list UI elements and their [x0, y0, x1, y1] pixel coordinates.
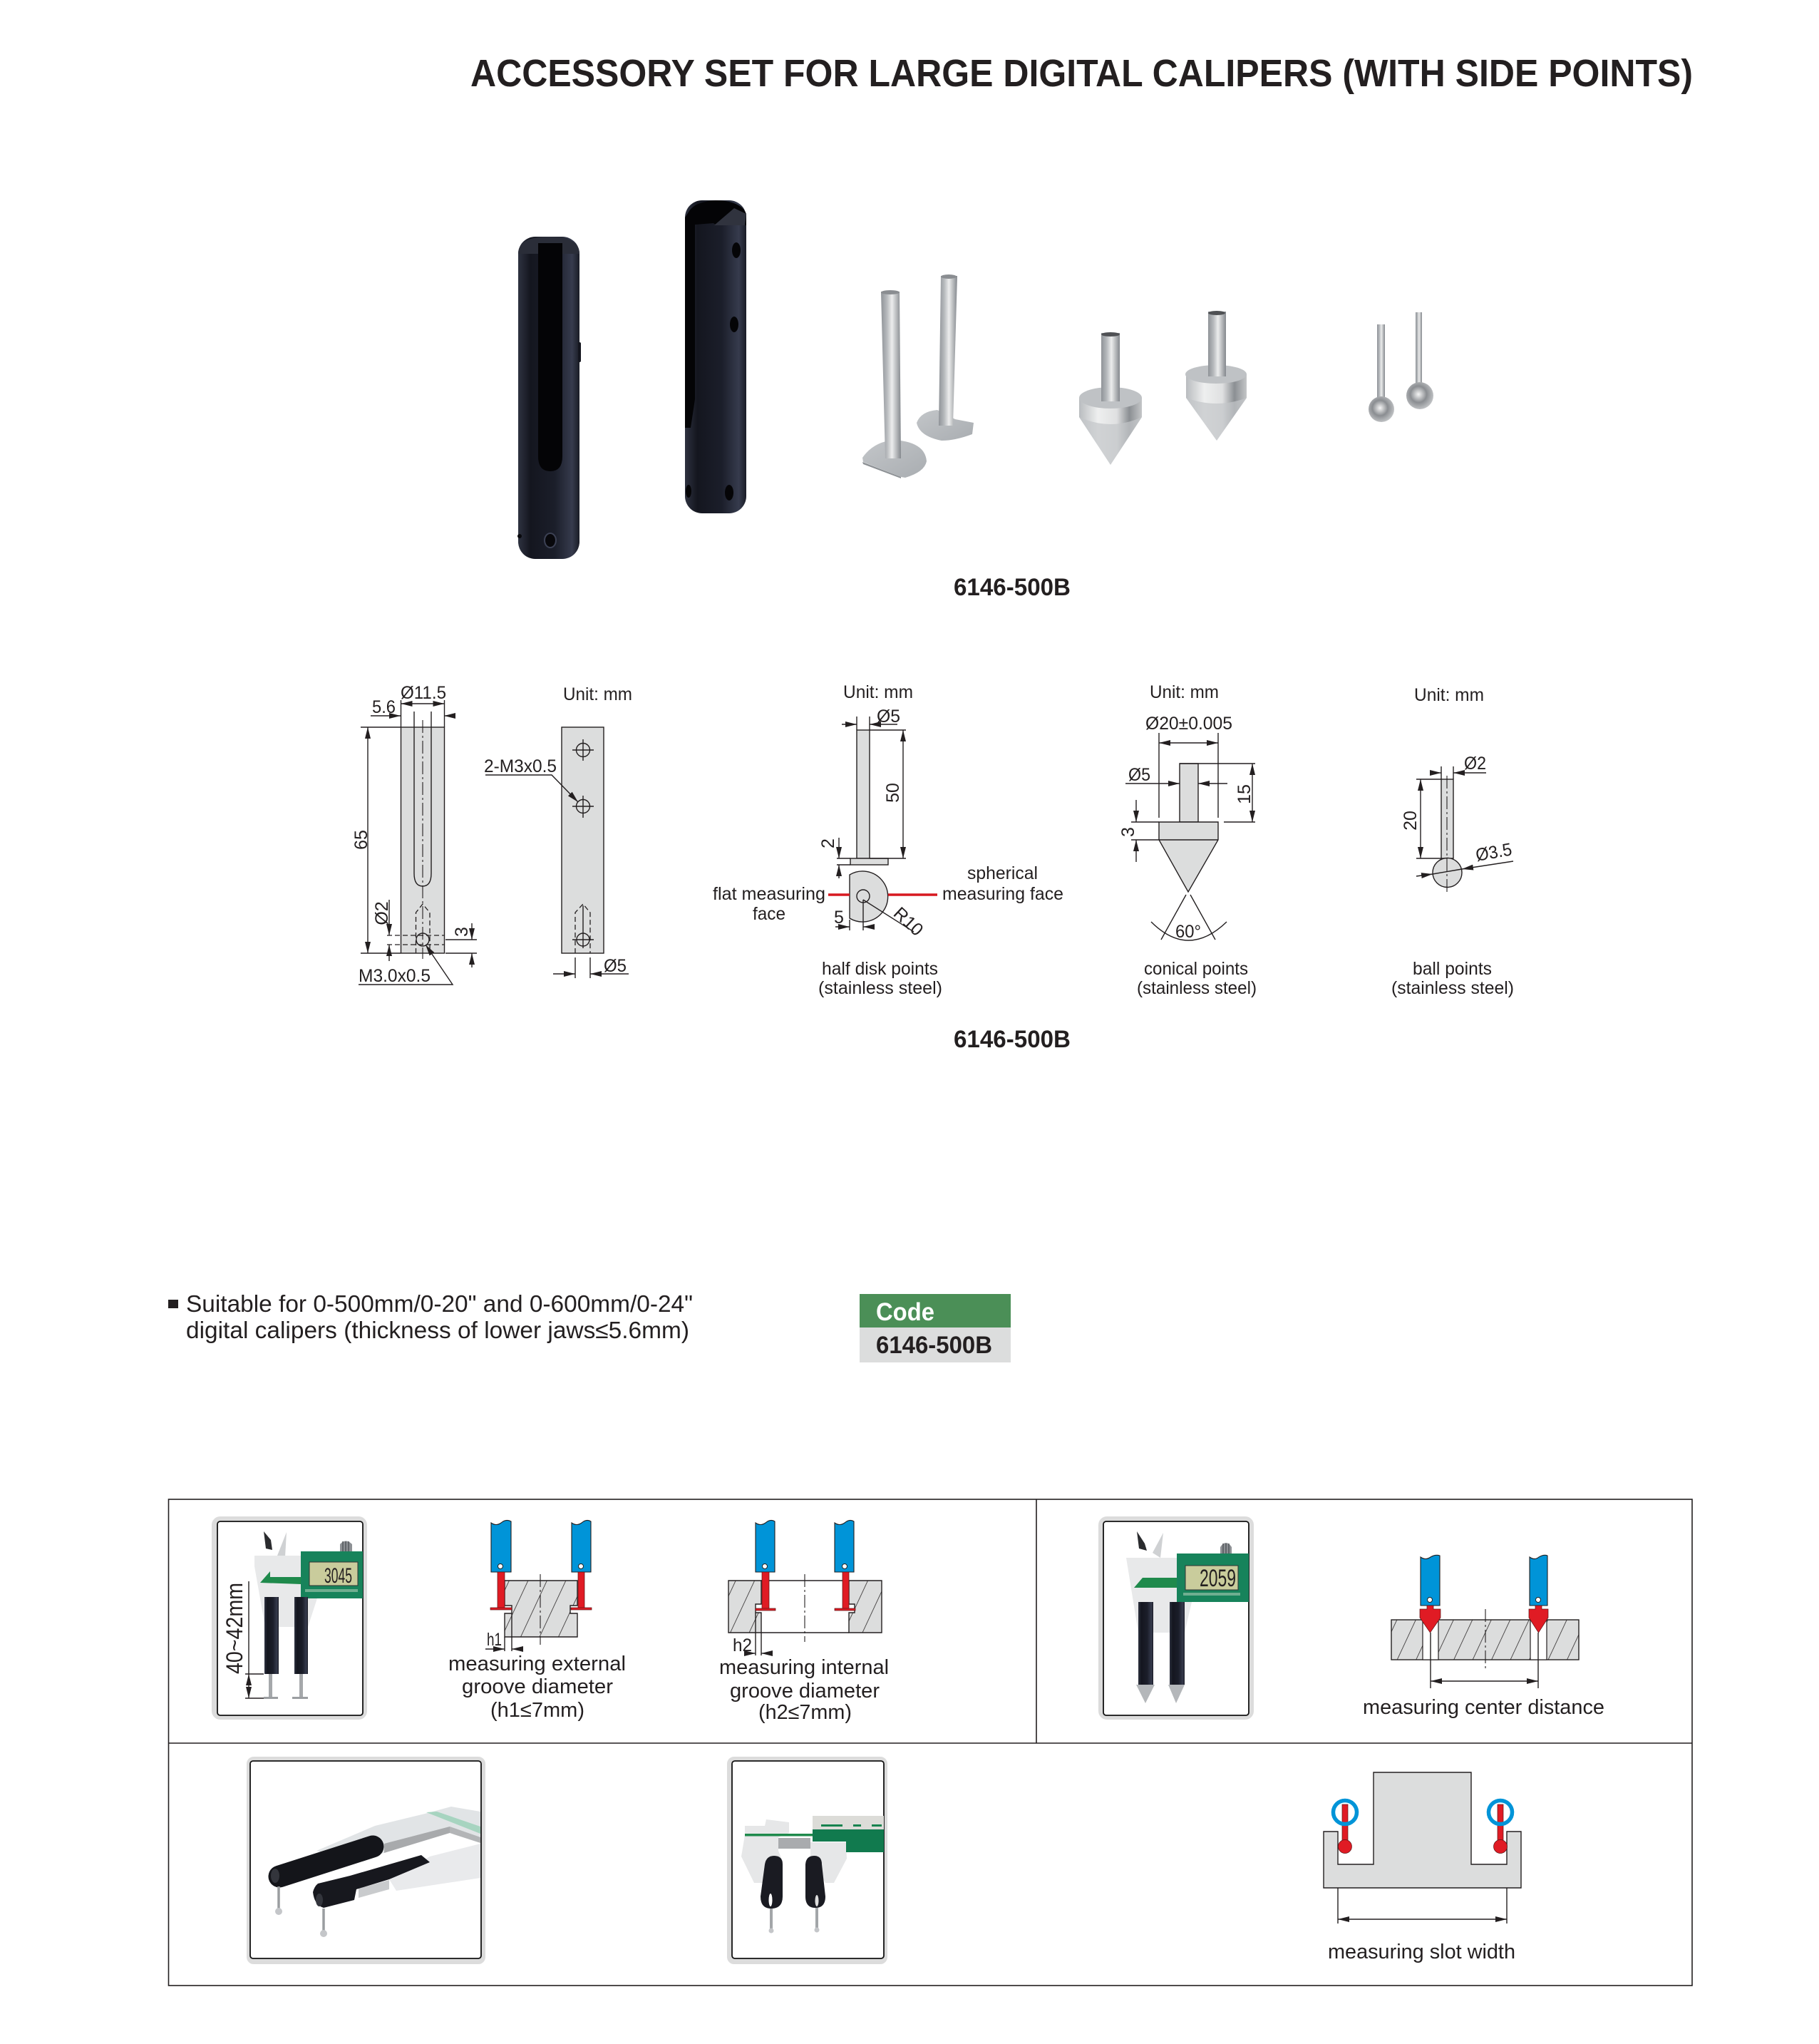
caption: measuring slot width	[1328, 1941, 1515, 1963]
diagram: measuring slot width	[1324, 1772, 1521, 1963]
labels: (stainless steel)	[1391, 978, 1514, 998]
model number under photo: 6146-500B	[954, 574, 1071, 601]
labels: 50	[883, 783, 903, 803]
dimension labels: 2-M3x0.5	[484, 756, 557, 776]
lcd reading: 2059	[1200, 1565, 1236, 1592]
caption	[448, 1630, 626, 1722]
product photo: black holder tubes and points	[517, 200, 1433, 559]
caption: groove diameter	[730, 1680, 880, 1703]
caption: measuring external	[448, 1653, 626, 1675]
diagram: measuring center distance	[1363, 1555, 1604, 1719]
labels: ball points	[1413, 959, 1492, 979]
title: ACCESSORY SET FOR LARGE DIGITAL CALIPERS (WITH SIDE POINTS)	[470, 52, 1693, 95]
height dimension label: 40~42mm	[222, 1583, 247, 1674]
labels: spherical	[967, 863, 1038, 883]
caption: h2	[733, 1635, 752, 1655]
ball points	[1369, 312, 1433, 422]
code table	[860, 1294, 1011, 1362]
labels: Unit: mm	[1414, 685, 1484, 705]
caption: (h2≤7mm)	[758, 1701, 852, 1724]
labels: conical points	[1144, 959, 1248, 979]
labels: 5	[834, 908, 844, 928]
labels: Unit: mm	[1150, 682, 1219, 702]
dimension labels: Unit: mm	[563, 684, 632, 704]
labels: measuring face	[942, 884, 1063, 904]
photo: caliper with half disk points, 40~42mm	[215, 1519, 364, 1717]
lcd reading: 3045	[324, 1564, 352, 1588]
labels: Ø20±0.005	[1145, 714, 1232, 734]
labels: 3	[1118, 827, 1138, 837]
labels: 2	[818, 838, 838, 848]
diagram: measuring external groove diameter	[448, 1520, 626, 1722]
labels: Ø5	[877, 707, 900, 726]
caption: h1	[487, 1630, 502, 1650]
code table: Code	[876, 1298, 934, 1326]
labels: Ø2	[1464, 754, 1486, 774]
photo: half disk points front view	[730, 1760, 885, 1961]
labels: 60°	[1175, 922, 1201, 942]
lower tube	[313, 1855, 430, 1908]
labels: half disk points	[822, 959, 938, 979]
labels: Ø3.5	[1474, 839, 1513, 866]
diagram: measuring internal groove diameter	[719, 1520, 889, 1724]
labels: Ø5	[1128, 765, 1150, 785]
upper tube	[279, 1847, 373, 1876]
usage table frame	[168, 1499, 1692, 1986]
dimension labels	[484, 684, 632, 976]
drawing: conical points	[1118, 682, 1257, 998]
caption: (h1≤7mm)	[490, 1699, 584, 1722]
labels: (stainless steel)	[818, 978, 942, 998]
red measuring-face leaders	[828, 893, 937, 896]
dimension labels: Ø11.5	[401, 683, 446, 703]
caption: measuring center distance	[1363, 1696, 1604, 1719]
dimension labels	[351, 683, 472, 986]
labels: (stainless steel)	[1137, 978, 1257, 998]
drawing: holder tube side view	[484, 684, 632, 978]
drawing: ball points	[1391, 685, 1514, 998]
dimension labels: M3.0x0.5	[359, 966, 431, 986]
code table: 6146-500B	[876, 1332, 992, 1359]
feature bullet text: digital calipers (thickness of lower jaws≤5.6mm)	[186, 1317, 689, 1343]
feature bullet text	[168, 1290, 693, 1343]
labels: flat measuring	[713, 884, 825, 904]
half disk points	[862, 274, 974, 478]
labels: face	[753, 904, 785, 924]
caption: measuring internal	[719, 1656, 889, 1679]
dimension labels: 3	[452, 927, 472, 937]
conical points	[1079, 311, 1247, 465]
photo: caliper with conical points	[1101, 1519, 1251, 1717]
dimension labels: 65	[351, 830, 371, 850]
labels: 15	[1235, 784, 1254, 804]
labels	[713, 682, 1063, 998]
labels: 20	[1401, 811, 1421, 831]
model number under drawings: 6146-500B	[954, 1026, 1071, 1053]
labels: Unit: mm	[843, 682, 913, 702]
drawing: half disk points	[713, 682, 1063, 998]
labels: R10	[890, 903, 927, 940]
drawing: holder tube front view	[351, 683, 477, 986]
dimension labels: Ø2	[372, 901, 392, 925]
tube 1	[517, 237, 581, 559]
caption: groove diameter	[462, 1675, 613, 1698]
caption	[719, 1635, 889, 1724]
labels	[1391, 685, 1514, 998]
labels	[1118, 682, 1257, 998]
dimension labels: Ø5	[604, 956, 627, 976]
feature bullet text: Suitable for 0-500mm/0-20" and 0-600mm/0-24"	[186, 1290, 693, 1317]
tube 2	[685, 200, 746, 513]
dimension labels: 5.6	[372, 697, 396, 717]
photo: half disk points angled view	[249, 1760, 483, 1961]
